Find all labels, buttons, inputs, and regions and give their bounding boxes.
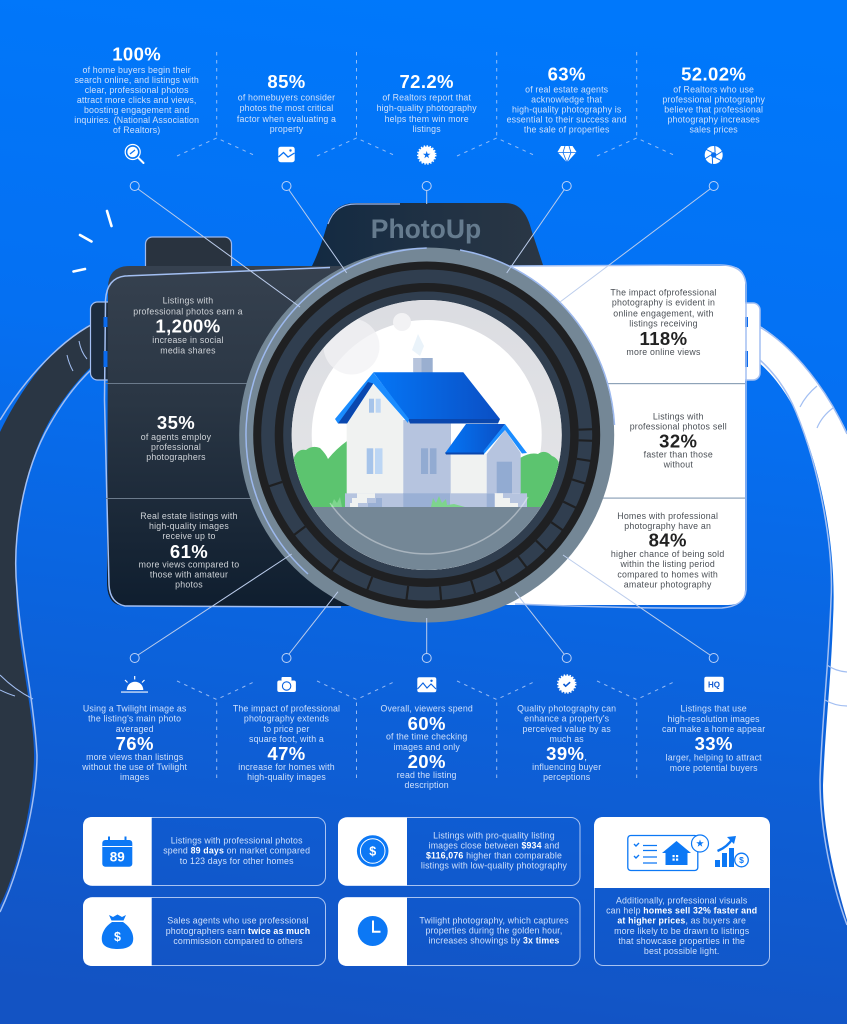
card: 89 days on market: to 123 days for other homes	[180, 856, 294, 866]
stat: 100% of home buyers	[74, 44, 199, 135]
stat: 63% of real estate agents: of real estate agents	[525, 84, 609, 94]
stat: 39% perceived value: enhance a property's	[524, 714, 610, 724]
stat: 47% price per square foot: increase for homes with	[238, 762, 335, 772]
stat: 84% higher chance	[611, 511, 724, 589]
stat: 85% of homebuyers	[237, 71, 336, 134]
stat: 47% price per square foot: to price per	[264, 724, 309, 734]
stat: 72.2% of Realtors: listings	[413, 124, 441, 134]
icon: money bag	[102, 914, 133, 949]
stat: 100% of home buyers: of home buyers begin their	[83, 65, 191, 75]
card: twilight photography 3x showings: properties during the golden hour,	[426, 926, 562, 936]
icon: dollar coin	[357, 835, 389, 867]
leader lines and pins: bottom	[130, 554, 718, 662]
card: twice as much commission: commission compared to others	[173, 936, 303, 946]
stat: 1,200% social media shares: 1,200%	[155, 316, 221, 337]
stat: 47% price per square foot: square foot, with a	[249, 734, 324, 744]
stat: 84% higher chance: Homes with professional	[617, 511, 718, 521]
right strap lug	[735, 303, 760, 380]
left camera strap	[0, 316, 108, 912]
stat: 100% of home buyers: boosting engagement and	[84, 105, 189, 115]
stat: 60% and 20% viewing time: read the listing	[397, 770, 457, 780]
stat: 61% more views	[139, 511, 239, 590]
stat: 118% more online views: The impact ofprofessional	[610, 288, 717, 298]
stat: 84% higher chance: within the listing period	[619, 559, 715, 569]
stat: 33% larger	[662, 704, 765, 773]
stat: 32% faster	[630, 411, 727, 469]
stat: 35% of agents: professional	[151, 442, 201, 452]
stat: 52.02% of Realtors: sales prices	[690, 124, 738, 134]
stat: 39% perceived value: Quality photography can	[517, 704, 616, 714]
stat: 61% more views: receive up to	[162, 531, 216, 541]
stat: 61% more views: 61%	[170, 541, 208, 562]
stat: 84% higher chance: photography have an	[624, 521, 711, 531]
stat: 47% price per square foot: photography extends	[244, 714, 330, 724]
stat: 100% of home buyers: attract more clicks and views,	[77, 95, 197, 105]
bushes	[293, 441, 560, 507]
stat: 33% larger: Listings that use	[681, 704, 747, 714]
stat: 100% of home buyers: of Realtors)	[113, 125, 160, 135]
left strap lug	[90, 302, 116, 380]
stat: 35% of agents: photographers	[146, 452, 206, 462]
card: $934 to $116,076 higher: Listings with pro-quality listing	[433, 830, 555, 840]
stat: 47% price per square foot: high-quality images	[247, 772, 326, 782]
stat: 118% more online views: online engagement, with	[613, 308, 714, 318]
card: twilight photography 3x showings: Twilight photography, which captures	[419, 916, 569, 926]
stat: 35% of agents: of agents employ	[141, 432, 212, 442]
right camera strap	[745, 318, 847, 925]
grass	[331, 496, 465, 507]
icon: sunset	[121, 676, 148, 693]
icon: listing with house and growth chart	[628, 835, 748, 870]
stat: 76% more views: Using a Twilight image as	[83, 704, 187, 714]
stat: 52.02% of Realtors: of Realtors who use	[673, 84, 754, 94]
stat: 63% of real estate agents: high-quality photography is	[512, 104, 622, 114]
dashed dividers: bottom	[177, 681, 676, 778]
icon: money bag: $	[114, 930, 121, 944]
stat: 76% more views: more views than listings	[86, 752, 184, 762]
stat: 1,200% social media shares: Listings with	[163, 296, 213, 306]
stat: 61% more views: those with amateur	[150, 570, 228, 580]
card: twice as much commission	[83, 898, 326, 966]
foundation and steps	[345, 493, 527, 507]
card: $934 to $116,076 higher: listings with low-quality photography	[421, 861, 568, 871]
stat: 32% faster: professional photos sell	[630, 421, 727, 431]
stat: 60% and 20% viewing time: Overall, viewers spend	[380, 704, 473, 714]
stat: 1,200% social media shares: media shares	[160, 345, 216, 355]
stat: 84% higher chance: 84%	[649, 530, 687, 551]
stat: 1,200% social media shares	[133, 296, 243, 355]
stat: 52.02% of Realtors	[662, 64, 765, 134]
icon: dollar coin: $	[369, 844, 376, 858]
stat: 61% more views: Real estate listings with	[140, 511, 238, 521]
chimney	[413, 358, 433, 372]
stat: 76% more views: without the use of Twilight	[81, 762, 188, 772]
camera lens	[239, 248, 614, 622]
icon: HQ badge: HQ	[708, 680, 720, 690]
stat: 118% more online views: 118%	[640, 328, 687, 349]
camera shutter button	[146, 237, 232, 275]
stat: 85% of homebuyers: photos the most critical	[240, 103, 333, 113]
stat: 60% and 20% viewing time	[380, 704, 473, 790]
stat: 52.02% of Realtors: 52.02%	[681, 64, 746, 85]
stat: 39% perceived value: influencing buyer	[532, 762, 601, 772]
card: 89 days on market: spend 89 days on market compared	[163, 846, 310, 856]
stat: 61% more views: more views compared to	[139, 560, 239, 570]
house illustration	[294, 334, 559, 570]
stat: 72.2% of Realtors: of Realtors report that	[382, 92, 471, 102]
stat: 85% of homebuyers: of homebuyers consider	[238, 92, 335, 102]
stat: 52.02% of Realtors: believe that professional	[664, 104, 763, 114]
icon: aperture	[705, 145, 723, 165]
stat: 118% more online views: photography is evident in	[612, 298, 715, 308]
stat: 63% of real estate agents	[507, 64, 627, 134]
card: 89 days on market: Listings with professional photos	[171, 836, 303, 846]
stat: 35% of agents: 35%	[157, 412, 195, 433]
card: homes sell 32% faster: best possible light.	[644, 946, 719, 956]
stat: 32% faster: without	[663, 459, 693, 469]
stat: 60% and 20% viewing time: description	[405, 780, 449, 790]
stat: 1,200% social media shares: professional photos earn a	[133, 306, 243, 316]
stat: 32% faster: 32%	[659, 430, 697, 451]
card: homes sell 32% faster: Additionally, professional visuals	[616, 896, 748, 906]
windows and door	[369, 399, 374, 413]
stat: 32% faster: faster than those	[644, 449, 713, 459]
stat: 60% and 20% viewing time: 20%	[408, 751, 446, 772]
stat: 76% more views	[81, 704, 188, 782]
icon: star badge	[418, 146, 436, 164]
card: twilight photography 3x showings: increases showings by 3x times	[429, 936, 559, 946]
icon: calendar: 89	[110, 850, 125, 864]
stat: 84% higher chance: amateur photography	[624, 579, 712, 589]
stat: 33% larger: high-resolution images	[668, 714, 760, 724]
icon: magnifier	[125, 144, 144, 163]
lens grip ticks	[269, 429, 593, 600]
stat: 33% larger: more potential buyers	[670, 763, 758, 773]
stat: 63% of real estate agents: acknowledge that	[531, 94, 603, 104]
icon: diamond	[558, 146, 576, 162]
main roof	[373, 372, 500, 419]
stat: 72.2% of Realtors: 72.2%	[399, 71, 454, 92]
card: homes sell 32% faster	[594, 817, 770, 966]
panel: camera body dark side	[104, 266, 440, 607]
sparkle lines	[74, 211, 112, 272]
stat: 60% and 20% viewing time: of the time checking	[386, 732, 467, 742]
card: twice as much commission: photographers earn twice as much	[166, 926, 310, 936]
stat: 47% price per square foot	[233, 704, 340, 782]
stat: 33% larger: can make a home appear	[662, 724, 765, 734]
stat: 60% and 20% viewing time: 60%	[408, 713, 446, 734]
card: $934 to $116,076 higher: images close between $934 and	[429, 840, 559, 850]
stat: 85% of homebuyers: factor when evaluating a	[237, 114, 336, 124]
card: homes sell 32% faster: that showcase properties in the	[618, 936, 745, 946]
stat: 85% of homebuyers: property	[270, 124, 304, 134]
house walls	[403, 420, 451, 494]
stat: 1,200% social media shares: increase in social	[152, 335, 224, 345]
stat: 63% of real estate agents: 63%	[548, 64, 586, 85]
stat: 72.2% of Realtors: high-quality photography	[377, 103, 477, 113]
panel: camera body white side	[420, 265, 746, 608]
stat: 47% price per square foot: The impact of professional	[233, 704, 340, 714]
stat: 118% more online views	[610, 288, 717, 357]
card: homes sell 32% faster: at higher prices, as buyers are	[617, 916, 746, 926]
icon: check badge	[558, 675, 576, 693]
stat: 84% higher chance: higher chance of being sold	[611, 549, 724, 559]
stat: 100% of home buyers: 100%	[112, 44, 161, 65]
icon: camera	[277, 677, 296, 692]
stat: 39% perceived value	[517, 704, 616, 782]
dashed dividers: top	[177, 52, 676, 156]
stat: 39% perceived value: perceptions	[543, 772, 591, 782]
stat: 60% and 20% viewing time: images and only	[393, 742, 460, 752]
card: 89 days on market	[83, 817, 326, 886]
stat: 76% more views: 76%	[116, 733, 154, 754]
stat: 52.02% of Realtors: professional photography	[662, 94, 765, 104]
card: homes sell 32% faster: more likely to be drawn to listings	[614, 926, 750, 936]
stat: 84% higher chance: compared to homes with	[617, 569, 718, 579]
icon: clock	[358, 916, 388, 946]
stat: 100% of home buyers: search online, and listings with	[74, 75, 199, 85]
card: twilight photography 3x showings	[338, 898, 580, 966]
stat: 32% faster: Listings with	[653, 411, 704, 421]
stat: 85% of homebuyers: 85%	[267, 71, 306, 92]
icon: calendar	[102, 836, 132, 867]
stat: 76% more views: averaged	[116, 724, 154, 734]
stat: 72.2% of Realtors: helps them win more	[385, 114, 469, 124]
card: $934 to $116,076 higher: $116,076 higher than comparable	[426, 850, 562, 860]
stat: 61% more views: high-quality images	[149, 521, 229, 531]
card: $934 to $116,076 higher	[338, 818, 580, 886]
stat: 35% of agents	[141, 412, 212, 462]
icon: HQ badge	[704, 677, 724, 692]
stat: 33% larger: larger, helping to attract	[666, 752, 762, 762]
smoke	[412, 334, 424, 356]
icon: image	[278, 147, 295, 162]
stat: 61% more views: photos	[175, 580, 203, 590]
leader lines and pins: top	[130, 182, 718, 307]
stat: 52.02% of Realtors: photography increases	[668, 114, 760, 124]
stat: 76% more views: the listing's main photo	[88, 714, 181, 724]
stat: 76% more views: images	[120, 772, 150, 782]
card: homes sell 32% faster: can help homes sell 32% faster and	[606, 906, 757, 916]
stat: 39% perceived value: much as	[550, 734, 584, 744]
stat: 47% price per square foot: 47%	[267, 743, 306, 764]
front roof	[445, 424, 505, 453]
stat: 100% of home buyers: inquiries. (National Association	[74, 115, 199, 125]
stat: 63% of real estate agents: essential to their success and	[507, 114, 627, 124]
card: twice as much commission: Sales agents who use professional	[167, 916, 309, 926]
logo: PhotoUp: PhotoUp	[371, 214, 481, 244]
stat: 39% perceived value: 39%,	[546, 743, 587, 764]
stat: 118% more online views: listings receiving	[629, 319, 698, 329]
icon: landscape image	[417, 677, 436, 692]
stat: 72.2% of Realtors	[377, 71, 477, 134]
stat: 39% perceived value: perceived value by as	[522, 724, 611, 734]
stat: 118% more online views: more online views	[626, 347, 701, 357]
ground	[312, 507, 541, 570]
stat: 100% of home buyers: clear, professional photos	[85, 85, 189, 95]
camera top housing with logo	[311, 203, 544, 268]
icon: listing with house and growth chart: $	[739, 855, 744, 865]
stat: 63% of real estate agents: the sale of properties	[524, 124, 610, 134]
stat: 33% larger: 33%	[695, 733, 733, 754]
